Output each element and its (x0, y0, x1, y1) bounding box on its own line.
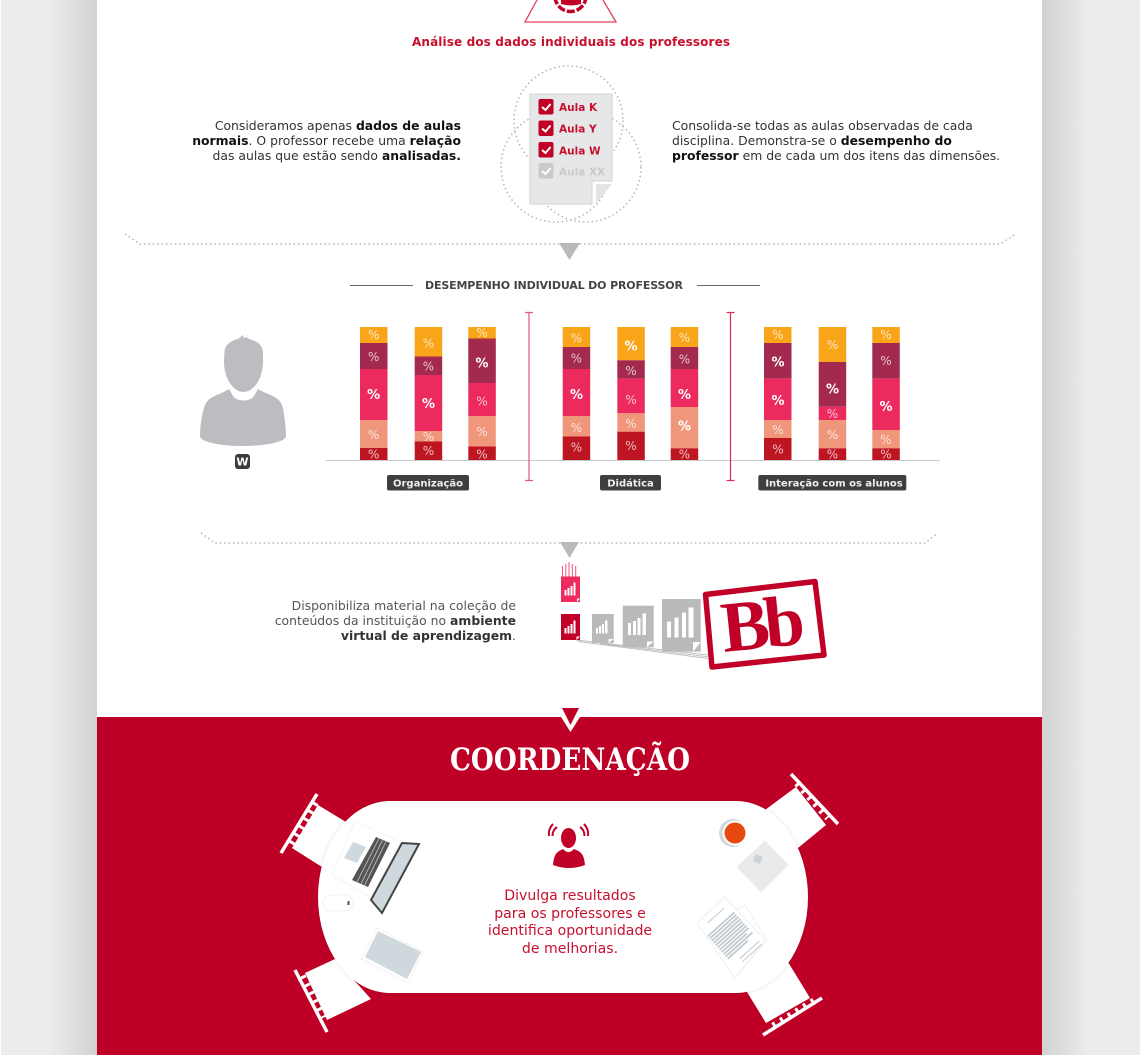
dotted connector with arrow (125, 234, 1016, 260)
bar: Interação 1: % (771, 394, 785, 409)
bar: Didática 3: % (678, 388, 691, 403)
arrow into section (561, 708, 580, 732)
bar: Didática 2: % (625, 439, 637, 453)
bar: Didática 1: % (571, 440, 582, 454)
bar: Interação 1: % (771, 356, 785, 370)
bar: Interação 1: % (772, 423, 784, 437)
bar: Organização 1: % (368, 350, 379, 364)
bar: Interação 2: % (827, 338, 838, 352)
bar: Interação 1 (764, 327, 792, 460)
panel: meeting table (318, 801, 808, 993)
dotted connector with arrow (201, 533, 938, 558)
notebook (738, 842, 787, 891)
text block: consolidation: disciplina. Demonstra-se o desempenho do (672, 133, 952, 148)
bar: Didática 3 (671, 327, 698, 462)
illustration: documents flowing into Blackboard (561, 599, 708, 658)
tablet (361, 928, 423, 983)
bar: Organização 2: % (423, 444, 434, 458)
bar: Organização 1 (360, 327, 388, 462)
chair: bottom right (747, 962, 822, 1035)
text block: virtual learning environment: conteúdos da instituição no ambiente (275, 613, 516, 628)
bar: Didática 1: % (571, 332, 582, 346)
bar: Interação 2: % (827, 428, 838, 442)
bar: Organização 2 (415, 327, 442, 460)
section: Coordenação (97, 708, 1042, 1055)
label: Interação com os alunos (758, 475, 906, 490)
illustration: class checklist: Aula Y (559, 124, 597, 136)
bar: Organização 2: % (423, 430, 434, 444)
bar: Didática 2: % (625, 393, 637, 407)
heading: individual data analysis: Análise dos dados individuais dos professores (412, 35, 730, 49)
divider marks between dimensions (525, 312, 734, 480)
bar: Interação 3: % (880, 328, 892, 342)
icon: professor silhouette (200, 335, 286, 469)
laptop (332, 821, 419, 913)
bar: Organização 3: % (476, 326, 488, 340)
bar: Didática 3: % (679, 448, 690, 462)
label: Organização: Organização (393, 478, 463, 490)
heading: Coordenação: COORDENAÇÃO (450, 740, 690, 778)
bar: Didática 2: % (624, 340, 638, 354)
text block: normal classes: normais. O professor recebe uma relação (192, 133, 461, 148)
text block: normal classes (192, 118, 461, 163)
logo: Blackboard Bb: Bb (717, 580, 806, 668)
bar: Organização 2: % (423, 336, 434, 350)
bar: Didática 3: % (679, 331, 690, 345)
bar: Didática 2 (617, 327, 645, 460)
bar: Interação 3: % (880, 448, 892, 462)
bar: Didática 2: % (625, 364, 637, 378)
bar: Interação 2: % (827, 448, 838, 462)
bar: Interação 1: % (772, 442, 784, 456)
label: Organização (387, 475, 469, 490)
chair: top left (281, 794, 346, 867)
papers (697, 897, 767, 978)
coffee cup (719, 819, 748, 847)
text block: normal classes: das aulas que estão sendo analisadas. (213, 148, 461, 163)
illustration: class checklist: Aula K (559, 102, 598, 114)
bar: Didática 2: % (625, 417, 637, 431)
label: Interação com os alunos: Interação com os alunos (765, 478, 903, 490)
bar: Interação 1: % (772, 328, 784, 342)
bar: Organização 1: % (368, 428, 379, 442)
bar: Didática 1: % (570, 388, 583, 403)
label: Didática (600, 475, 661, 490)
label: Didática: Didática (607, 478, 654, 490)
text block: dissemination of results: Divulga resultados (504, 888, 636, 904)
text block: dissemination of results: para os professores e (494, 906, 646, 922)
bar: Organização 3: % (476, 394, 488, 408)
bar: Organização 1: % (367, 388, 380, 403)
bar: Didática 1: % (571, 352, 582, 366)
illustration: class checklist: Aula W (559, 146, 601, 158)
bar: Organização 1: % (368, 448, 379, 462)
text block: virtual learning environment (275, 598, 516, 643)
illustration: class checklist (501, 66, 641, 222)
bar: Interação 3: % (879, 400, 893, 415)
text block: virtual learning environment: Disponibiliza material na coleção de (292, 598, 516, 613)
bar: Interação 3: % (880, 354, 892, 368)
bar: Organização 3: % (476, 448, 488, 462)
bar: Didática 3: % (679, 352, 690, 366)
text block: consolidation: Consolida-se todas as aulas observadas de cada (672, 118, 973, 133)
icon: pink document with rising lines (561, 562, 580, 602)
chart: stacked percentage bars (326, 326, 940, 462)
bar: Organização 2: % (423, 360, 434, 374)
bar: Interação 3 (872, 327, 900, 462)
illustration: class checklist: Aula XX (559, 166, 605, 178)
text block: consolidation: professor em de cada um dos itens das dimensões. (672, 148, 1000, 163)
icon: speaking person (549, 824, 588, 868)
bar: Organização 1: % (368, 328, 379, 342)
heading: individual performance: DESEMPENHO INDIVIDUAL DO PROFESSOR (425, 279, 684, 292)
bar: Organização 3: % (475, 356, 489, 372)
bar: Organização 3 (468, 326, 496, 462)
chair: bottom left (295, 959, 371, 1032)
icon: professor silhouette: W (236, 456, 249, 468)
text block: dissemination of results (488, 888, 652, 957)
chair: top right (765, 774, 838, 848)
bar: Didática 1 (563, 327, 590, 460)
bar: Organização 2: % (422, 397, 435, 412)
text block: dissemination of results: de melhorias. (522, 941, 618, 957)
text block: consolidation (672, 118, 1000, 163)
icon: triangle with professor (525, 0, 616, 22)
text block: dissemination of results: identifica oportunidade (488, 923, 652, 939)
bar: Interação 2: % (827, 407, 838, 421)
bar: Interação 2 (819, 327, 846, 462)
bar: Didática 3: % (678, 420, 691, 434)
bar: Interação 3: % (880, 433, 892, 447)
text block: virtual learning environment: virtual de aprendizagem. (341, 628, 516, 643)
text block: normal classes: Consideramos apenas dados de aulas (215, 118, 461, 133)
mouse (323, 895, 353, 911)
bar: Interação 2: % (826, 382, 839, 398)
bar: Didática 1: % (571, 421, 582, 435)
bar: Organização 3: % (476, 425, 488, 439)
